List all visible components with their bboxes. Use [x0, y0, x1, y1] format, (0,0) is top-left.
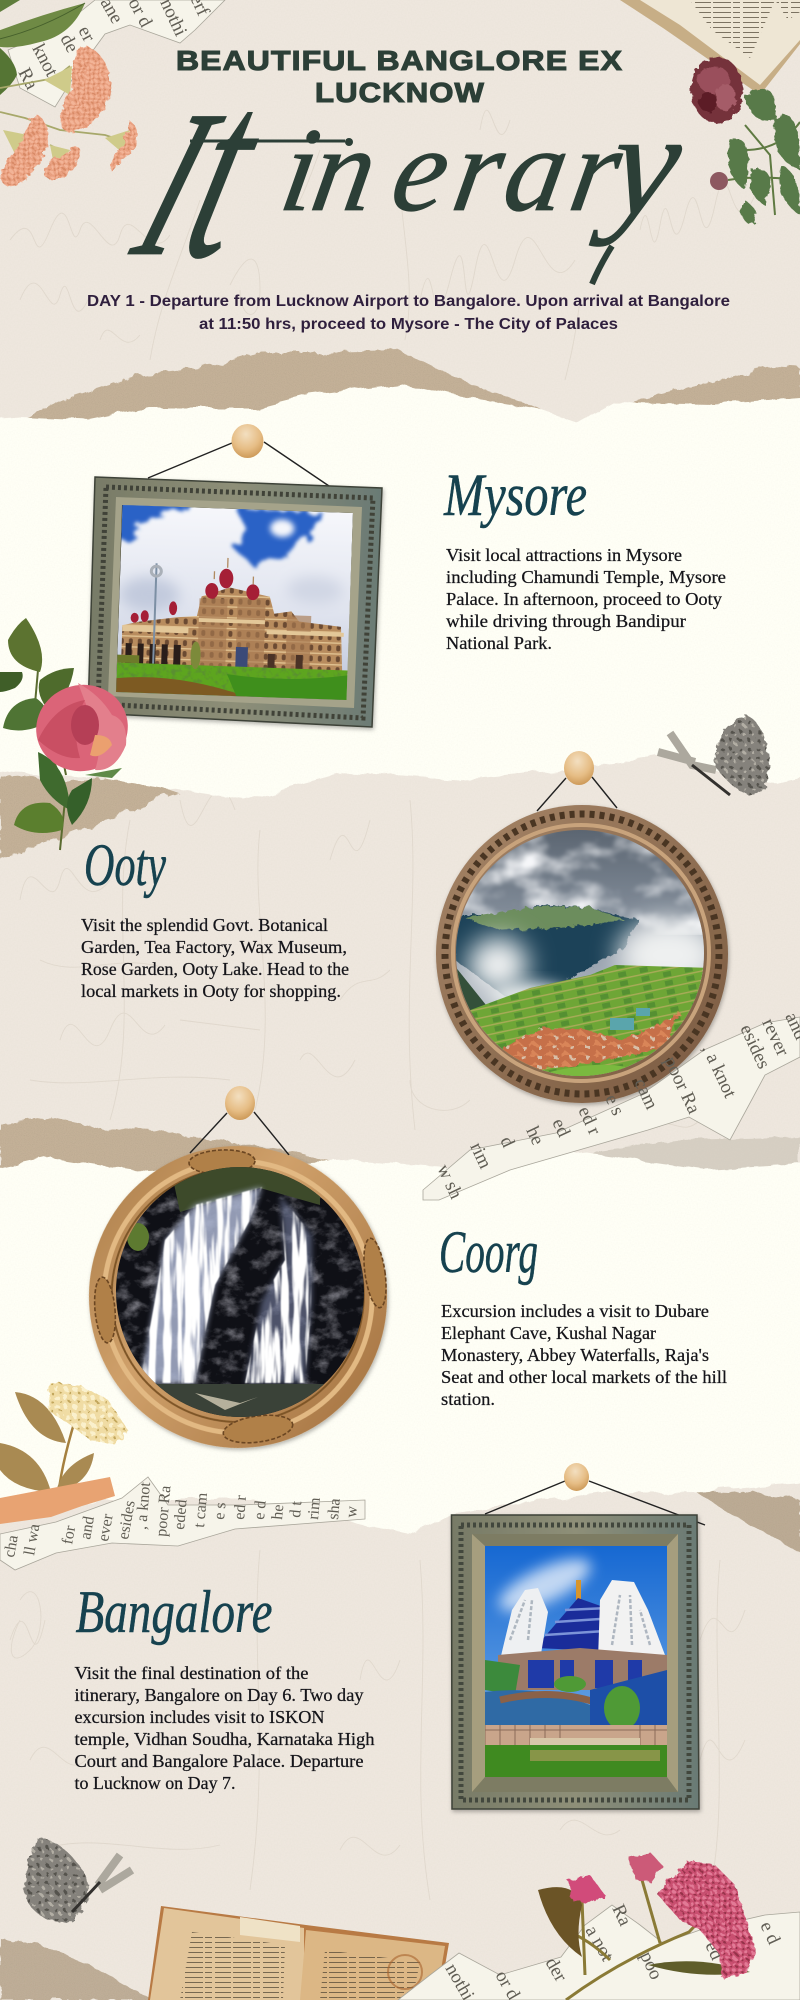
newspaper strip: bottom left: rim — [305, 1496, 324, 1520]
newspaper strip: right: rim — [465, 1139, 496, 1172]
intro text: day 1: at 11:50 hrs, proceed to Mysore - The City of Palaces — [199, 316, 618, 333]
picture frame — [452, 1515, 699, 1809]
newspaper strip: right: poor Ra — [659, 1053, 704, 1118]
band 2 grey paper edge — [556, 1137, 800, 1180]
oval picture frame — [69, 1127, 407, 1467]
script heading: Itinerary: inerar — [272, 104, 632, 237]
newspaper strip: bottom left: ll wa — [21, 1523, 43, 1557]
text: Ooty: Ooty — [84, 832, 166, 898]
text: Coorg: station. — [441, 1389, 495, 1409]
hanging peg and strings — [485, 1463, 705, 1525]
panel: Mysore framed photo — [88, 424, 382, 727]
text: Mysore: National Park. — [446, 633, 552, 653]
newspaper strip: bottom right: ed — [700, 1938, 727, 1964]
newspaper strip: bottom left: e d — [251, 1500, 270, 1520]
picture frame — [88, 477, 382, 727]
newspaper strip: right: w sh — [432, 1161, 467, 1203]
newspaper strip: bottom left: poor Ra — [153, 1485, 174, 1537]
script heading: Itinerary: y — [588, 81, 691, 247]
text: Mysore: Palace. In afternoon, proceed to Ooty — [446, 589, 722, 609]
panel: white band Mysore — [0, 383, 800, 800]
panel: white band Coorg — [0, 1153, 800, 1534]
text: Bangalore: to Lucknow on Day 7. — [74, 1773, 235, 1793]
newspaper strip: top left — [8, 0, 225, 107]
icon: butterfly bottom left — [25, 1838, 132, 1923]
icon: top-left green leaves — [0, 0, 85, 95]
hanging peg and strings — [190, 1086, 289, 1155]
icon: butterfly right — [658, 715, 769, 795]
text: Mysore — [443, 462, 726, 653]
newspaper strip: right: , a knot — [697, 1041, 741, 1102]
torn tan paper: right of Bangalore — [694, 1490, 800, 1552]
icon: top-left orange flowers — [0, 46, 138, 186]
newspaper strip: bottom right: Ra — [607, 1901, 636, 1930]
newspaper strip: bottom left: cha — [1, 1534, 22, 1559]
torn tan paper: left of Ooty — [0, 775, 178, 858]
newspaper strip: bottom right: e d — [755, 1918, 784, 1948]
panel: Bangalore framed photo — [452, 1463, 705, 1809]
newspaper strip: top left: er — [74, 22, 99, 46]
newspaper strip: bottom right: der — [541, 1954, 571, 1986]
icon: pressed pink flowers — [538, 1852, 755, 2000]
newspaper strip: bottom left: sha — [325, 1498, 344, 1520]
text: Ooty — [81, 832, 349, 1001]
photo: Abbey waterfall — [116, 1167, 364, 1417]
newspaper strip: bottom right — [398, 1901, 800, 2000]
script heading: Itinerary: I — [111, 67, 245, 300]
title: BEAUTIFUL BANGLORE EX — [176, 45, 623, 76]
frame ornaments — [92, 1149, 390, 1447]
hanging peg and strings — [148, 424, 329, 486]
photo: Mysore Palace — [108, 497, 353, 700]
hanging peg and strings — [537, 751, 617, 811]
title: LUCKNOW — [315, 77, 485, 108]
text: Bangalore: itinerary, Bangalore on Day 6. Two day — [74, 1685, 364, 1705]
newspaper strip: right: cam — [629, 1075, 662, 1113]
text: Mysore: including Chamundi Temple, Mysore — [446, 567, 726, 587]
newspaper strip: top left: knot — [28, 40, 62, 81]
intro text: day 1 — [87, 293, 730, 333]
newspaper strip: bottom left: w — [343, 1505, 361, 1518]
text: Coorg — [439, 1219, 727, 1409]
newspaper strip: bottom right: poo — [635, 1948, 667, 1983]
newspaper strip: bottom left: and — [77, 1515, 98, 1541]
photo: Ooty hills — [456, 830, 704, 1076]
newspaper strip: right: ed r — [573, 1103, 605, 1139]
text: Mysore: Visit local attractions in Mysore — [446, 545, 682, 565]
newspaper strip: bottom left: for — [59, 1524, 79, 1546]
newspaper strip: right: d — [495, 1133, 519, 1151]
newspaper strip: right — [423, 1009, 800, 1203]
newspaper strip: bottom left: esides — [115, 1499, 139, 1541]
newspaper strip: bottom left: he — [269, 1504, 287, 1520]
text: Coorg: Elephant Cave, Kushal Nagar — [441, 1323, 656, 1343]
newspaper strip: bottom right: a not — [581, 1922, 618, 1966]
newspaper strip: top left: Ra — [14, 64, 42, 93]
text: Coorg: Monastery, Abbey Waterfalls, Raja's — [441, 1345, 709, 1365]
icon: top-right open book — [620, 0, 800, 95]
round picture frame — [436, 805, 728, 1103]
text: Bangalore: Visit the final destination of the — [74, 1663, 309, 1683]
text: Ooty: Garden, Tea Factory, Wax Museum, — [81, 937, 347, 957]
text: Bangalore: Bangalore — [76, 1579, 272, 1645]
icon: pink rose with leaves — [0, 618, 138, 850]
text: Ooty: Visit the splendid Govt. Botanical — [81, 915, 328, 935]
newspaper strip: bottom left: ed r — [231, 1494, 250, 1520]
text: Coorg: Coorg — [439, 1219, 538, 1285]
title — [176, 45, 623, 108]
newspaper strip: bottom left: t cam — [191, 1491, 211, 1528]
newspaper strip: bottom left: d t — [287, 1500, 305, 1518]
text: Ooty: local markets in Ooty for shopping. — [81, 981, 341, 1001]
newspaper strip: right: he — [521, 1123, 548, 1148]
icon: pressed cream flower — [0, 1382, 128, 1500]
newspaper strip: right: esides — [735, 1021, 774, 1072]
text: Bangalore: temple, Vidhan Soudha, Karnataka High — [74, 1729, 375, 1749]
newspaper strip: bottom left: e s — [211, 1502, 229, 1520]
icon: top-right rose and leaves — [691, 57, 800, 225]
panel: Coorg oval framed photo — [88, 1086, 391, 1452]
newspaper strip: bottom left: eded — [171, 1499, 191, 1530]
newspaper strip: right: ed — [547, 1115, 574, 1141]
text: Ooty: Rose Garden, Ooty Lake. Head to the — [81, 959, 349, 979]
script heading: Itinerary — [111, 29, 691, 312]
newspaper strip: bottom left — [0, 1477, 365, 1570]
script heading: Itinerary: t — [162, 29, 291, 312]
intro text: day 1: DAY 1 - Departure from Lucknow Airport to Bangalore. Upon arrival at Bangalore — [87, 293, 730, 310]
icon: orange tape — [0, 1477, 115, 1524]
newspaper strip: bottom left: , a knot — [133, 1481, 154, 1530]
panel: Ooty round framed photo — [436, 751, 728, 1103]
newspaper strip: right: rever — [757, 1015, 793, 1060]
text: Coorg: Seat and other local markets of the hill — [441, 1367, 727, 1387]
text: Mysore: Mysore — [443, 462, 587, 528]
torn tan paper: top — [20, 350, 800, 440]
text: Mysore: while driving through Bandipur — [446, 611, 686, 631]
torn tan paper: bottom left — [0, 1938, 153, 2000]
text: Bangalore — [74, 1579, 375, 1793]
newspaper strip: bottom left: ever — [95, 1512, 117, 1543]
text: Coorg: Excursion includes a visit to Dubare — [441, 1301, 709, 1321]
icon: open book bottom — [148, 1906, 449, 2000]
text: Bangalore: Court and Bangalore Palace. Departure — [74, 1751, 364, 1771]
photo: ISKCON temple — [485, 1546, 667, 1777]
text: Bangalore: excursion includes visit to ISKON — [74, 1707, 325, 1727]
newspaper strip: top left: de — [56, 30, 83, 56]
newspaper strip: right: e s — [600, 1091, 628, 1119]
torn tan paper: above Coorg — [0, 1117, 352, 1190]
